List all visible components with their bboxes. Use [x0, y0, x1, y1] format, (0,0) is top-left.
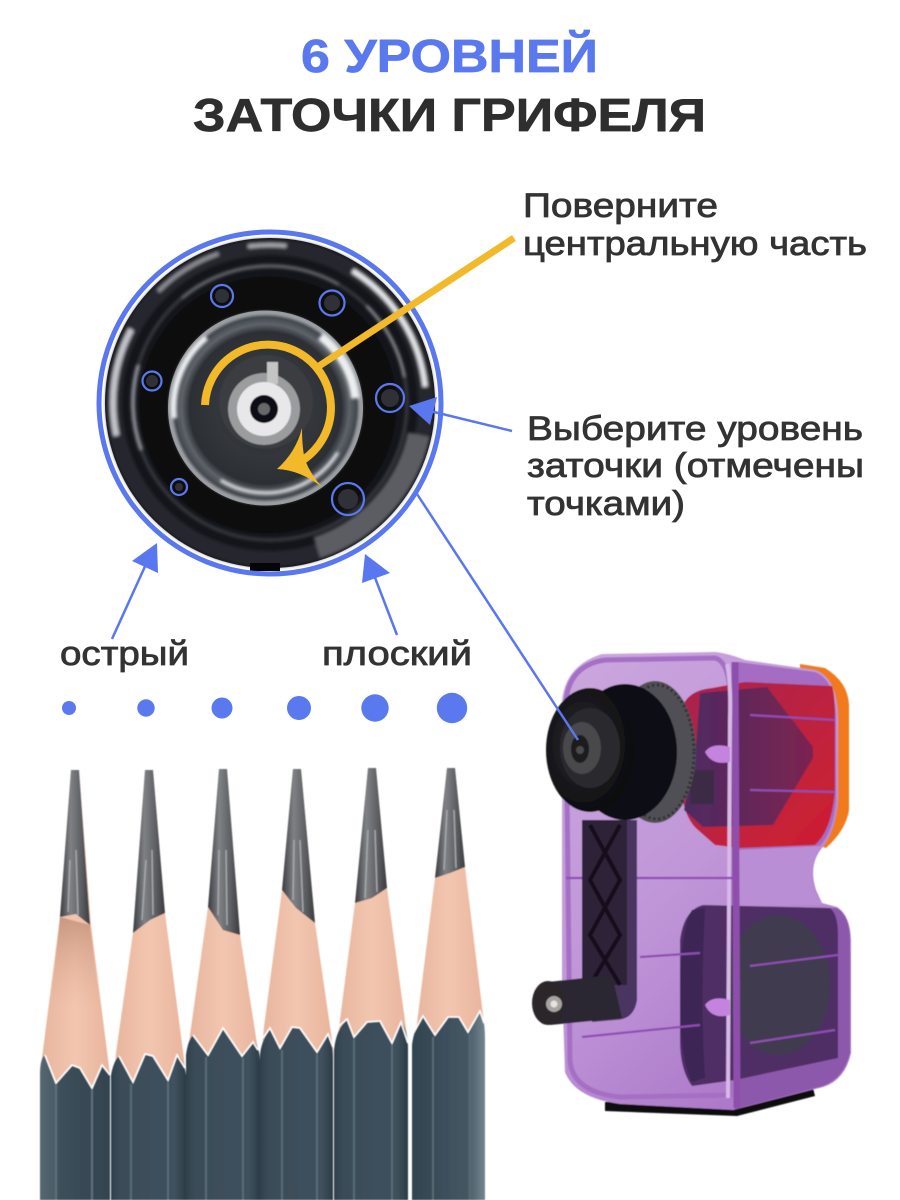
yellow rotate arrow	[205, 345, 331, 487]
label: turn the centre part	[523, 187, 867, 263]
pencil 4	[260, 769, 333, 1200]
arrow: flat	[362, 554, 397, 635]
label: choose the level: точками)	[527, 485, 685, 523]
body	[562, 652, 851, 1110]
notch region	[737, 846, 822, 905]
title	[193, 30, 706, 141]
knurled ring	[614, 681, 696, 823]
label: choose the level: Выберите уровень	[527, 410, 863, 448]
arrow: sharp	[112, 543, 158, 639]
indicator dots on dial	[146, 289, 399, 509]
pencil 1	[40, 770, 110, 1200]
level markers on dial	[142, 285, 404, 515]
ribs	[566, 715, 838, 1043]
dark left lobe of box	[680, 908, 705, 1082]
knob	[573, 684, 677, 820]
pencil 6	[412, 768, 485, 1200]
arrow: dial to sharpener	[417, 494, 578, 740]
blue ring around dial	[99, 232, 441, 574]
pencils	[40, 768, 485, 1200]
label: sharp: острый	[60, 635, 189, 673]
arrow: to level dot	[409, 397, 512, 431]
side panel top	[738, 662, 836, 850]
spring	[690, 770, 714, 804]
photo: purple sharpener	[532, 652, 851, 1116]
pencil 2	[111, 770, 186, 1200]
size dots scale	[62, 693, 467, 723]
crank handle	[532, 975, 622, 1025]
pencil 3	[186, 769, 260, 1200]
yellow pointer line	[316, 238, 514, 368]
dark shavings box	[680, 905, 838, 1086]
label: flat: плоский	[322, 635, 472, 673]
black base	[605, 1088, 815, 1116]
side seam	[735, 662, 737, 1108]
grey oval in box	[726, 915, 830, 1055]
pegs	[705, 745, 730, 1016]
label: turn the centre part: Поверните	[523, 187, 718, 225]
red cartridge	[680, 682, 835, 848]
photo: sharpener dial close-up	[47, 180, 493, 626]
label: choose the level	[527, 410, 864, 523]
label: choose the level: заточки (отмечены	[527, 447, 864, 485]
frame darkening on the front panel	[566, 658, 730, 1097]
pencil 5	[334, 768, 408, 1200]
title line: sharpening: ЗАТОЧКИ ГРИФЕЛЯ	[193, 89, 706, 141]
label: turn the centre part: центральную часть	[523, 225, 867, 263]
orange back	[800, 664, 849, 848]
side panel lower	[735, 908, 850, 1109]
title line: 6 levels: 6 УРОВНЕЙ	[301, 30, 598, 82]
blade housing	[684, 687, 813, 827]
crank arm	[582, 820, 637, 1022]
